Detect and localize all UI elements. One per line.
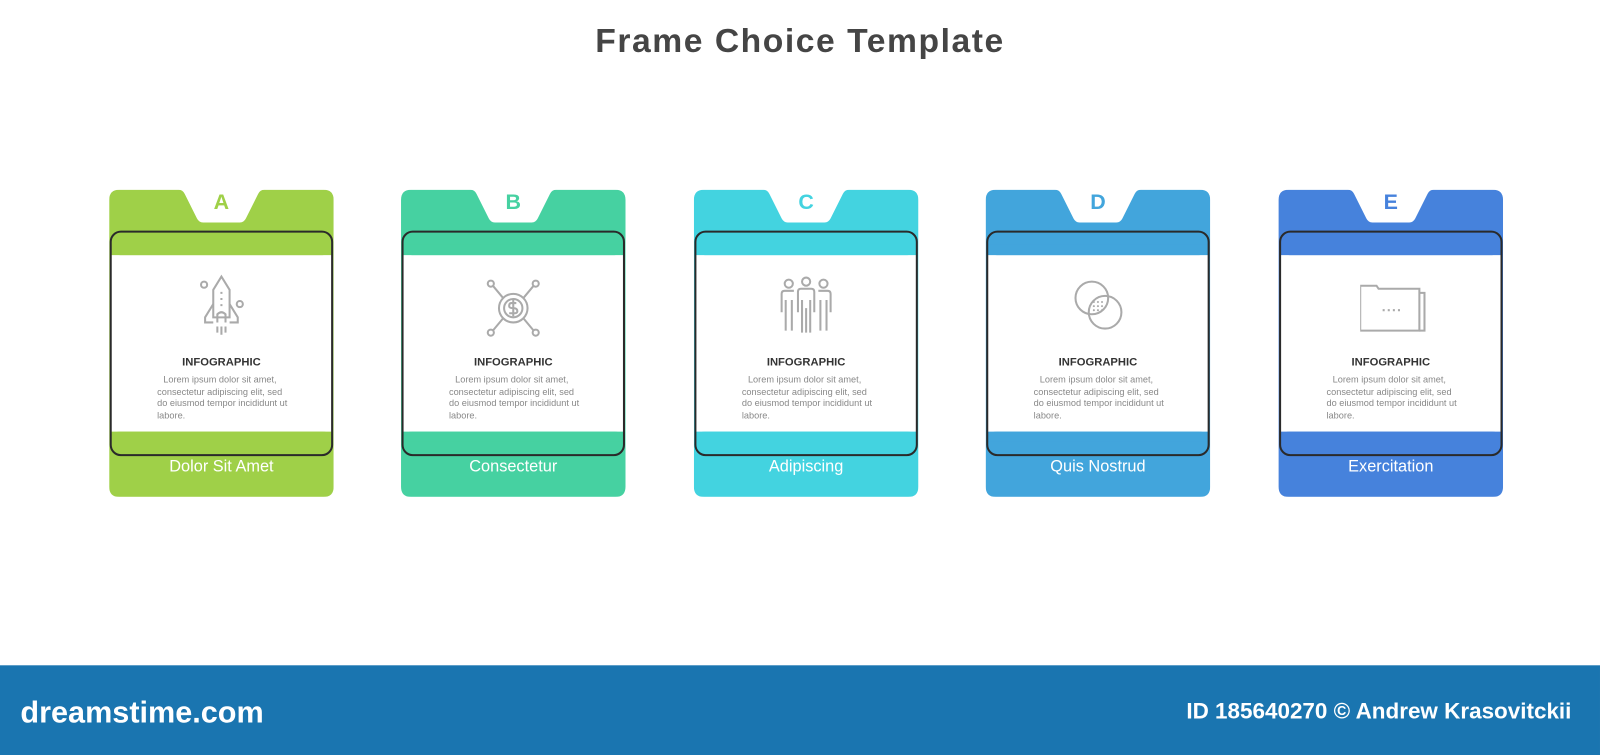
text: Lorem ipsum dolor sit amet, consectetur adipiscing elit, sed do eiusmod tempor incididunt ut labore. (449, 374, 579, 420)
heading: INFOGRAPHIC (1059, 356, 1137, 368)
label: Adipiscing (769, 458, 843, 476)
card D (986, 190, 1210, 497)
letter A: A (214, 191, 229, 214)
icon: people (780, 276, 832, 333)
text: Lorem ipsum dolor sit amet, consectetur adipiscing elit, sed do eiusmod tempor incididunt ut labore. (157, 374, 287, 420)
card B (401, 190, 626, 497)
heading: INFOGRAPHIC (1352, 356, 1430, 368)
label: Dolor Sit Amet (169, 458, 274, 476)
text: Lorem ipsum dolor sit amet, consectetur adipiscing elit, sed do eiusmod tempor incididunt ut labore. (1327, 374, 1457, 420)
text: Lorem ipsum dolor sit amet, consectetur adipiscing elit, sed do eiusmod tempor incididunt ut labore. (1034, 374, 1164, 420)
letter D: D (1090, 191, 1106, 214)
footer bar (0, 665, 1600, 755)
card C (694, 190, 918, 497)
footer logo: dreamstime.com (20, 696, 264, 730)
letter E: E (1384, 191, 1398, 214)
card E (1278, 190, 1503, 497)
icon: rocket (200, 274, 244, 335)
footer credit: ID 185640270 © Andrew Krasovitckii (1186, 698, 1571, 723)
text: Lorem ipsum dolor sit amet, consectetur adipiscing elit, sed do eiusmod tempor incididunt ut labore. (742, 374, 872, 420)
card A (109, 190, 334, 497)
letter B: B (506, 191, 521, 214)
heading: INFOGRAPHIC (767, 356, 845, 368)
heading: INFOGRAPHIC (182, 356, 261, 368)
letter C: C (798, 191, 814, 214)
heading: INFOGRAPHIC (474, 356, 553, 368)
icon: overlapping circles (1074, 280, 1122, 330)
title: Frame Choice Template (595, 21, 1005, 59)
label: Exercitation (1348, 458, 1433, 476)
label: Consectetur (469, 458, 557, 476)
label: Quis Nostrud (1050, 458, 1146, 476)
icon: dollar network (486, 280, 540, 337)
icon: folder (1360, 284, 1426, 332)
